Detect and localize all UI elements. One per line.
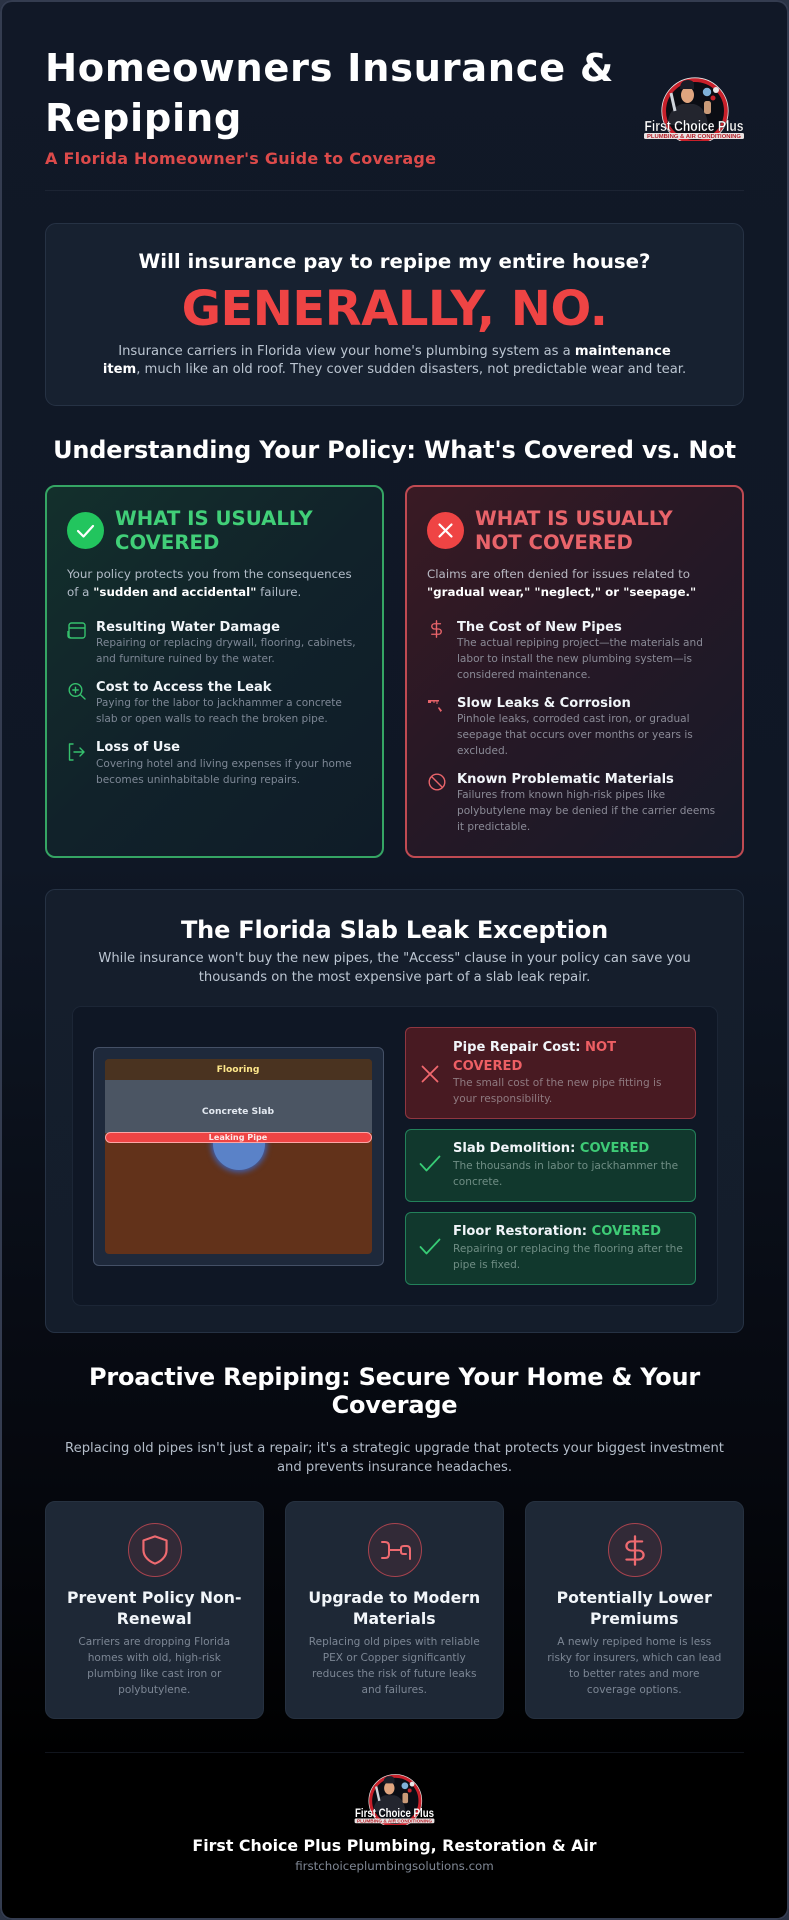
item: resulting water damage: and furniture ruined by the water. (96, 653, 275, 665)
panel: usually covered (45, 485, 384, 858)
card: potentially lower premiums: A newly repiped home is less (557, 1636, 711, 1648)
subtitle: A Florida Homeowner's Guide to Coverage (45, 148, 436, 168)
card: upgrade to modern materials (284, 1501, 504, 1719)
not covered intro: "gradual wear," "neglect," or "seepage." (427, 585, 696, 599)
header: title and logo (45, 46, 744, 168)
covered intro: of a "sudden and accidental" failure. (67, 585, 301, 599)
proactive intro: Replacing old pipes isn't just a repair; it's a strategic upgrade that protects your biggest investment (65, 1441, 724, 1456)
card: prevent policy non-renewal: plumbing like cast iron or (87, 1668, 221, 1680)
callout: floor restoration: pipe is fixed. (453, 1259, 520, 1271)
item: cost of new pipes: labor to install the new plumbing system—is (457, 653, 692, 665)
title: Homeowners Insurance & (45, 46, 614, 91)
covered intro: Your policy protects you from the consequences (67, 567, 352, 581)
callout: pipe repair cost (405, 1027, 696, 1119)
water leak (212, 1118, 264, 1170)
icon: shield (128, 1523, 182, 1577)
covered heading: COVERED (115, 531, 219, 554)
logo: PLUMBING & AIR CONDITIONING (647, 134, 741, 140)
card: prevent policy non-renewal: homes with old, high-risk (88, 1652, 221, 1664)
card: potentially lower premiums (524, 1501, 744, 1719)
callout: floor restoration (405, 1212, 696, 1285)
card: upgrade to modern materials: Materials (353, 1609, 436, 1628)
icon: pipe (368, 1523, 422, 1577)
item: slow leaks and corrosion (428, 696, 693, 757)
item: loss of use (68, 740, 352, 786)
icon: exit arrow (68, 743, 85, 761)
panel: usually not covered (405, 485, 744, 858)
hero explanation: item, much like an old roof. They cover sudden disasters, not predictable wear and tear. (103, 362, 686, 377)
item: loss of use: becomes uninhabitable during repairs. (96, 774, 300, 786)
icon: dollar (608, 1523, 662, 1577)
card: upgrade to modern materials: PEX or Copper significantly (323, 1652, 466, 1664)
item: known problematic materials (428, 772, 715, 833)
panel: florida slab leak exception (45, 889, 744, 1333)
heading: proactive repiping (89, 1363, 700, 1418)
card: prevent policy non-renewal: Carriers are dropping Florida (78, 1636, 230, 1648)
icon: dollar (431, 620, 442, 638)
flooring layer: Flooring (217, 1064, 259, 1074)
card: prevent policy non-renewal: polybutylene. (118, 1684, 190, 1696)
title: Repiping (45, 96, 242, 141)
card: upgrade to modern materials: and failures. (362, 1684, 427, 1696)
item: known problematic materials: polybutylene may be denied if the carrier deems (457, 805, 715, 817)
card: potentially lower premiums: Premiums (590, 1609, 678, 1628)
icon: check (420, 1238, 440, 1254)
card: upgrade to modern materials: reduces the risk of future leaks (312, 1668, 476, 1680)
item: resulting water damage (67, 620, 356, 665)
footer logo: PLUMBING & AIR CONDITIONING (357, 1818, 432, 1823)
slab heading: The Florida Slab Leak Exception (181, 916, 608, 944)
icon: x (422, 1066, 438, 1082)
item: known problematic materials: it predictable. (457, 821, 530, 833)
heading: proactive repiping: Coverage (332, 1390, 457, 1418)
callout: slab demolition: The thousands in labor to jackhammer the (453, 1160, 678, 1172)
footer website: firstchoiceplumbingsolutions.com (295, 1859, 494, 1873)
icon: water damage (67, 622, 86, 639)
card: upgrade to modern materials: Upgrade to Modern (308, 1588, 480, 1607)
concrete slab layer: Concrete Slab (202, 1106, 274, 1116)
footer (192, 1774, 597, 1873)
item: resulting water damage: Repairing or replacing drywall, flooring, cabinets, (96, 637, 356, 649)
callout: slab demolition: Slab Demolition: COVERED (453, 1141, 649, 1156)
item: slow leaks and corrosion: excluded. (457, 745, 508, 757)
concrete slab layer (104, 1080, 372, 1132)
item: cost of new pipes (431, 620, 703, 681)
soil with layers (104, 1058, 372, 1254)
covered heading (115, 507, 313, 554)
inner panel (72, 1006, 718, 1306)
hero explanation (103, 344, 686, 377)
item: cost to access the leak: Paying for the labor to jackhammer a concrete (96, 697, 342, 709)
not covered heading: NOT COVERED (475, 531, 633, 554)
heading: proactive repiping: Proactive Repiping: Secure Your Home & Your (89, 1363, 700, 1391)
callout: pipe repair cost: your responsibility. (453, 1093, 552, 1105)
icon: ban (428, 774, 446, 790)
item: cost of new pipes: The actual repiping project—the materials and (457, 637, 703, 649)
hero explanation: Insurance carriers in Florida view your home's plumbing system as a maintenance (118, 344, 671, 359)
item: cost to access the leak: slab or open walls to reach the broken pipe. (96, 713, 328, 725)
card: potentially lower premiums: coverage options. (587, 1684, 682, 1696)
item: slow leaks and corrosion: Pinhole leaks, corroded cast iron, or gradual (457, 713, 690, 725)
item: cost of new pipes: The Cost of New Pipes (457, 620, 622, 635)
card: prevent policy non-renewal: Prevent Policy Non- (67, 1588, 241, 1607)
hero question: Will insurance pay to repipe my entire house? (139, 250, 650, 273)
not covered heading: WHAT IS USUALLY (475, 507, 673, 530)
callout: pipe repair cost: COVERED (453, 1058, 522, 1074)
proactive intro (65, 1441, 724, 1475)
title (45, 46, 614, 141)
callout: floor restoration: Floor Restoration: COVERED (453, 1224, 661, 1239)
card: potentially lower premiums: risky for insurers, which can lead (547, 1652, 721, 1664)
card: prevent policy non-renewal (44, 1501, 264, 1719)
not covered intro (427, 567, 696, 599)
logo (644, 77, 744, 141)
item: resulting water damage: Resulting Water Damage (96, 620, 280, 635)
callout: pipe repair cost: The small cost of the new pipe fitting is (453, 1077, 661, 1089)
item: cost to access the leak (68, 680, 342, 725)
card: potentially lower premiums: to better rates and more (569, 1668, 700, 1680)
leaking pipe (104, 1132, 372, 1142)
item: slow leaks and corrosion: Slow Leaks & Corrosion (457, 696, 631, 711)
panel: hero answer (45, 223, 744, 406)
covered intro (67, 567, 352, 599)
item: cost of new pipes: considered maintenance. (457, 669, 591, 681)
footer logo (354, 1774, 434, 1825)
icon: magnifier plus (68, 683, 86, 700)
item: known problematic materials: Failures from known high-risk pipes like (457, 789, 665, 801)
icon: leak (428, 700, 442, 712)
icon: red x (427, 512, 464, 549)
callout: slab demolition: concrete. (453, 1176, 502, 1188)
not covered heading (475, 507, 673, 554)
slab intro: thousands on the most expensive part of a slab leak repair. (199, 970, 590, 985)
item: slow leaks and corrosion: seepage that occurs over months or years is (457, 729, 693, 741)
heading: understanding your policy: Understanding Your Policy: What's Covered vs. Not (53, 436, 736, 464)
card: upgrade to modern materials: Replacing old pipes with reliable (309, 1636, 480, 1648)
diagram: slab cross-section (93, 1047, 384, 1266)
item: loss of use: Loss of Use (96, 740, 180, 755)
icon: green check (67, 512, 104, 549)
covered heading: WHAT IS USUALLY (115, 507, 313, 530)
hero answer: GENERALLY, NO. (182, 281, 607, 337)
callout: slab demolition (405, 1129, 696, 1202)
proactive intro: and prevents insurance headaches. (277, 1460, 512, 1475)
callout: pipe repair cost: Pipe Repair Cost: NOT (453, 1040, 616, 1055)
icon: check (420, 1156, 440, 1172)
callout: floor restoration: Repairing or replacing the flooring after the (453, 1243, 683, 1255)
item: known problematic materials: Known Problematic Materials (457, 772, 674, 787)
not covered intro: Claims are often denied for issues related to (427, 567, 690, 581)
item: cost to access the leak: Cost to Access the Leak (96, 680, 272, 695)
slab intro (98, 951, 691, 985)
item: loss of use: Covering hotel and living expenses if your home (96, 758, 352, 770)
card: prevent policy non-renewal: Renewal (117, 1609, 192, 1628)
footer company name: First Choice Plus Plumbing, Restoration & Air (192, 1836, 597, 1855)
card: potentially lower premiums: Potentially Lower (557, 1588, 712, 1607)
slab intro: While insurance won't buy the new pipes, the "Access" clause in your policy can save you (98, 951, 691, 966)
flooring layer (104, 1058, 372, 1080)
leaking pipe: Leaking Pipe (209, 1132, 267, 1142)
